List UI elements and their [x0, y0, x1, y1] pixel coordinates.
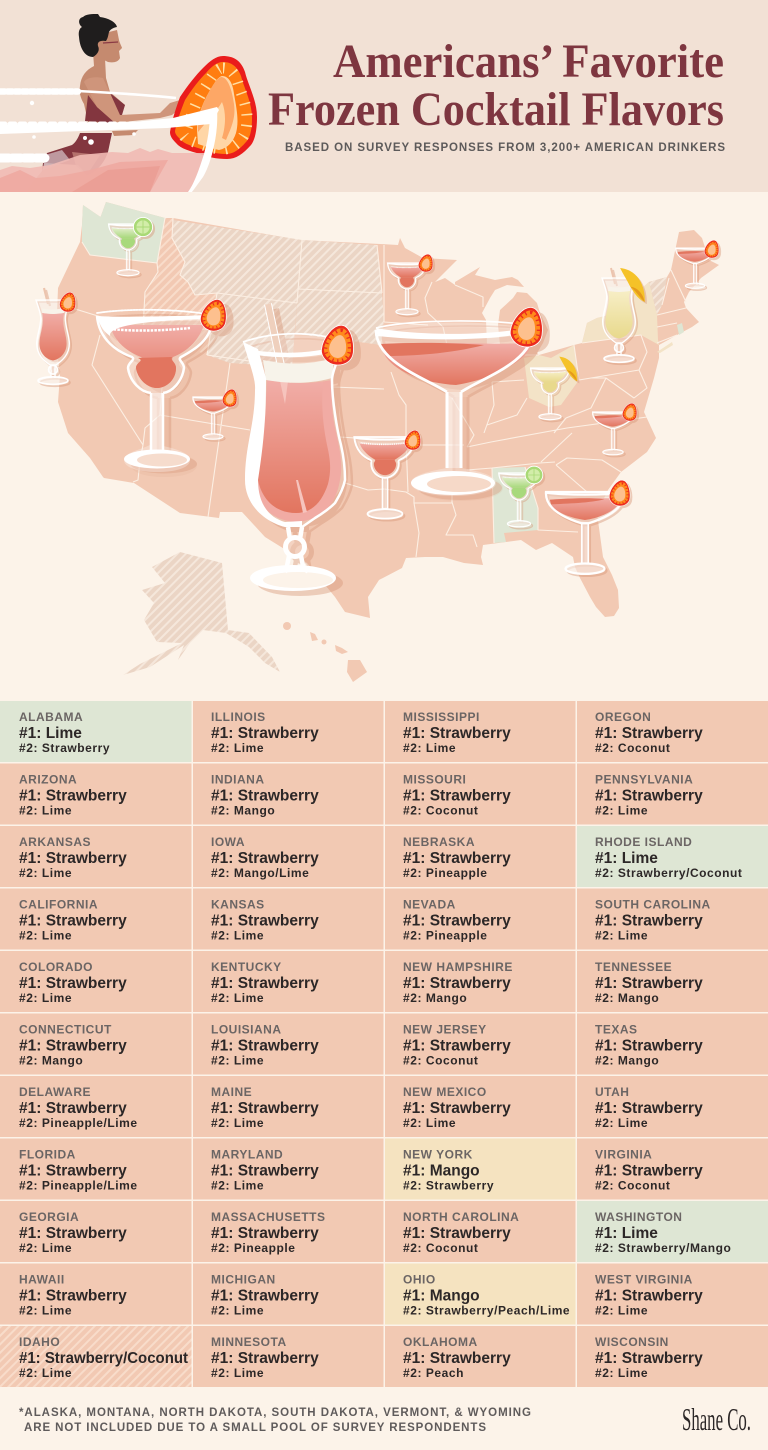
New Jersey: [385, 1014, 576, 1074]
Nevada: #1: Strawberry: [403, 912, 511, 930]
Tennessee: [577, 951, 768, 1012]
Utah: #2: Lime: [595, 1116, 648, 1130]
Delaware: DELAWARE: [19, 1085, 91, 1099]
Wisconsin: #2: Lime: [595, 1366, 648, 1380]
Vermont: [649, 277, 667, 315]
South Carolina: #1: Strawberry: [595, 912, 703, 930]
Nevada: [385, 888, 576, 950]
Kansas: KANSAS: [211, 898, 265, 912]
Illinois: #1: Strawberry: [211, 725, 319, 742]
Michigan: MICHIGAN: [211, 1272, 276, 1286]
liquid: [258, 380, 341, 522]
Ohio: [524, 345, 579, 407]
New Jersey: NEW JERSEY: [403, 1022, 487, 1036]
Texas: [577, 1014, 768, 1074]
Nebraska: #2: Pineapple: [403, 866, 488, 880]
New Jersey: #1: Strawberry: [403, 1038, 511, 1054]
Nebraska: NEBRASKA: [403, 835, 475, 849]
South Carolina: [577, 888, 768, 950]
West Virginia: [577, 1264, 768, 1324]
South Carolina: #2: Lime: [595, 928, 648, 942]
Tennessee: #2: Mango: [595, 991, 659, 1005]
West Virginia: WEST VIRGINIA: [595, 1272, 693, 1286]
arm: [84, 77, 184, 123]
Arizona: #1: Strawberry: [19, 788, 127, 804]
Louisiana: #1: Strawberry: [211, 1038, 319, 1054]
Idaho: #2: Lime: [19, 1366, 72, 1380]
drink: Alabama lime margarita: [499, 466, 543, 527]
Colorado: #1: Strawberry: [19, 975, 127, 992]
New Mexico: #2: Lime: [403, 1116, 456, 1130]
drink: Oklahoma strawberry margarita: [354, 429, 423, 519]
Minnesota: #1: Strawberry: [211, 1350, 319, 1367]
Florida: [0, 1138, 192, 1200]
Connecticut: #2: Mango: [19, 1054, 83, 1068]
Oregon: #2: Coconut: [595, 741, 670, 755]
Idaho: [143, 218, 217, 355]
Oregon: [577, 701, 768, 762]
Kansas: #1: Strawberry: [211, 912, 319, 930]
North Carolina: #1: Strawberry: [403, 1225, 511, 1242]
Wisconsin: [577, 1326, 768, 1387]
Virginia: #2: Coconut: [595, 1178, 670, 1192]
Indiana: INDIANA: [211, 772, 264, 786]
Kentucky: #1: Strawberry: [211, 975, 319, 992]
Maine: [193, 1076, 384, 1137]
drink: Ohio mango margarita: [531, 357, 577, 420]
Kentucky: [193, 951, 384, 1012]
Utah: [577, 1076, 768, 1137]
Missouri: #1: Strawberry: [403, 788, 511, 804]
drink: Illinois strawberry coupe: [376, 305, 546, 496]
Missouri: #2: Coconut: [403, 804, 478, 818]
Rhode Island: #2: Strawberry/Coconut: [595, 866, 742, 880]
Pennsylvania: [577, 764, 768, 824]
white left wall: [243, 342, 302, 527]
Minnesota: #2: Lime: [211, 1366, 264, 1380]
lower forearm: [112, 130, 138, 136]
Washington: WASHINGTON: [595, 1210, 682, 1224]
New York: #2: Strawberry: [403, 1178, 494, 1192]
Kansas: [193, 888, 384, 950]
Nebraska: #1: Strawberry: [403, 850, 511, 867]
Massachusetts: #1: Strawberry: [211, 1225, 319, 1242]
strawberry garnish: [608, 479, 632, 507]
strawberry garnish: [199, 297, 229, 333]
New Jersey: #2: Coconut: [403, 1054, 478, 1068]
Connecticut: CONNECTICUT: [19, 1022, 112, 1036]
Louisiana: LOUISIANA: [211, 1022, 282, 1036]
Ohio: #1: Mango: [403, 1288, 480, 1304]
Ohio: [385, 1264, 576, 1324]
Washington: #1: Lime: [595, 1225, 658, 1242]
face: [94, 30, 122, 62]
header panel: [0, 0, 768, 192]
North Carolina: [385, 1201, 576, 1262]
woman: [27, 14, 184, 192]
title: Americans’ Favorite: [333, 35, 724, 88]
Colorado: COLORADO: [19, 960, 93, 974]
Louisiana: [193, 1014, 384, 1074]
New Hampshire: #2: Mango: [403, 991, 467, 1005]
Idaho: [0, 1326, 192, 1387]
Texas: TEXAS: [595, 1022, 638, 1036]
Nevada: #2: Pineapple: [403, 928, 488, 942]
California: #2: Lime: [19, 928, 72, 942]
Colorado: #2: Lime: [19, 991, 72, 1005]
Tennessee: #1: Strawberry: [595, 975, 703, 992]
Rhode Island: [677, 323, 684, 335]
Mississippi: [385, 701, 576, 762]
Nebraska: [385, 826, 576, 887]
Massachusetts: [193, 1201, 384, 1262]
Hawaii: [283, 622, 367, 682]
Alabama: [0, 701, 192, 762]
Delaware: #1: Strawberry: [19, 1100, 127, 1117]
Alabama: ALABAMA: [19, 710, 83, 724]
drink: New York mango hurricane: [602, 268, 645, 362]
strawberry garnish: [58, 291, 78, 313]
strawberry garnish: [403, 429, 423, 451]
footnote: ARE NOT INCLUDED DUE TO A SMALL POOL OF SURVEY RESPONDENTS: [24, 1422, 486, 1434]
Washington: [82, 202, 165, 263]
subtitle: BASED ON SURVEY RESPONSES FROM 3,200+ AMERICAN DRINKERS: [285, 142, 725, 154]
New York: [582, 282, 673, 353]
New Mexico: #1: Strawberry: [403, 1100, 511, 1117]
Florida: FLORIDA: [19, 1148, 76, 1162]
drink: Colorado strawberry hurricane: [243, 304, 356, 591]
New Mexico: [385, 1076, 576, 1137]
New York: #1: Mango: [403, 1162, 480, 1180]
strawberry garnish: [703, 239, 721, 259]
Iowa: #1: Strawberry: [211, 850, 319, 867]
California: CALIFORNIA: [19, 898, 98, 912]
Oklahoma: #2: Peach: [403, 1366, 464, 1380]
drink: Florida strawberry coupe: [546, 479, 632, 574]
drink: Nevada strawberry coupe: [193, 388, 239, 439]
Florida: #1: Strawberry: [19, 1162, 127, 1180]
North Carolina: #2: Coconut: [403, 1241, 478, 1255]
straw: [268, 304, 281, 366]
drink: Oregon strawberry hurricane: [36, 288, 78, 384]
Alaska: [123, 552, 280, 675]
Arkansas: ARKANSAS: [19, 835, 91, 849]
foam: [263, 358, 334, 383]
Maryland: #1: Strawberry: [211, 1162, 319, 1180]
Idaho: #1: Strawberry/Coconut: [19, 1350, 188, 1367]
Ohio: OHIO: [403, 1272, 436, 1286]
Maine: #1: Strawberry: [211, 1100, 319, 1117]
Oklahoma: #1: Strawberry: [403, 1350, 511, 1367]
Hawaii: #1: Strawberry: [19, 1288, 127, 1304]
Michigan: #2: Lime: [211, 1304, 264, 1318]
Wisconsin: #1: Strawberry: [595, 1350, 703, 1367]
Oregon: #1: Strawberry: [595, 725, 703, 742]
Massachusetts: MASSACHUSETTS: [211, 1210, 326, 1224]
strawberry garnish: [221, 388, 239, 408]
Illinois: ILLINOIS: [211, 710, 266, 724]
table of state results: [0, 701, 768, 1387]
Minnesota: [193, 1326, 384, 1387]
Kentucky: #2: Lime: [211, 991, 264, 1005]
drink: Maine strawberry coupe: [676, 239, 721, 288]
Rhode Island: RHODE ISLAND: [595, 835, 692, 849]
drink: North Carolina strawberry coupe: [593, 402, 639, 455]
Minnesota: MINNESOTA: [211, 1335, 287, 1349]
Texas: #1: Strawberry: [595, 1038, 703, 1054]
Michigan: [193, 1264, 384, 1324]
Connecticut: #1: Strawberry: [19, 1038, 127, 1054]
illustration: woman in cocktail glass: [0, 14, 257, 192]
strawberry garnish: [417, 253, 435, 273]
Maine: #2: Lime: [211, 1116, 264, 1130]
legs behind the liquid: [27, 160, 110, 192]
Idaho: IDAHO: [19, 1335, 60, 1349]
Iowa: [193, 826, 384, 887]
rims: [243, 334, 345, 342]
neck, ball and base: [287, 527, 303, 566]
footnote: *ALASKA, MONTANA, NORTH DAKOTA, SOUTH DAKOTA, VERMONT, & WYOMING: [19, 1407, 531, 1419]
Delaware: [0, 1076, 192, 1137]
Alabama: #1: Lime: [19, 725, 82, 742]
Wisconsin: WISCONSIN: [595, 1335, 669, 1349]
Alabama: [492, 467, 538, 543]
Washington: [577, 1201, 768, 1262]
Hawaii: [0, 1264, 192, 1324]
Maryland: #2: Lime: [211, 1178, 264, 1192]
Pennsylvania: #1: Strawberry: [595, 788, 703, 804]
Arkansas: #1: Strawberry: [19, 850, 127, 867]
map of the United States: [56, 202, 719, 682]
Mississippi: #1: Strawberry: [403, 725, 511, 742]
Texas: #2: Mango: [595, 1054, 659, 1068]
swimsuit top: [85, 93, 125, 123]
Ohio: #2: Strawberry/Peach/Lime: [403, 1304, 570, 1318]
Oklahoma: OKLAHOMA: [403, 1335, 478, 1349]
California: [0, 888, 192, 950]
Mississippi: #2: Lime: [403, 741, 456, 755]
Indiana: #2: Mango: [211, 804, 275, 818]
cocktail glass liquid: [0, 148, 208, 192]
Virginia: [577, 1138, 768, 1200]
Maryland: MARYLAND: [211, 1148, 283, 1162]
New York: [385, 1138, 576, 1200]
lime garnish: [133, 217, 153, 237]
Indiana: [193, 764, 384, 824]
Missouri: [385, 764, 576, 824]
drink: Washington lime margarita: [109, 217, 153, 276]
lime garnish: [525, 466, 543, 484]
Arizona: #2: Lime: [19, 804, 72, 818]
Oregon: OREGON: [595, 710, 651, 724]
Rhode Island: #1: Lime: [595, 850, 658, 867]
right wall: [302, 342, 345, 527]
Pennsylvania: #2: Lime: [595, 804, 648, 818]
Illinois: [193, 701, 384, 762]
footnote: [19, 1407, 531, 1434]
strawberry garnish: [320, 323, 356, 367]
strawberry slice: [170, 56, 257, 159]
New Hampshire: NEW HAMPSHIRE: [403, 960, 513, 974]
mango garnish: [559, 357, 577, 381]
Montana: [172, 220, 302, 303]
glass rims: [0, 91, 219, 192]
Virginia: #1: Strawberry: [595, 1162, 703, 1180]
Michigan: #1: Strawberry: [211, 1288, 319, 1304]
contiguous states: [56, 202, 719, 618]
glass tint: [243, 335, 345, 527]
Illinois: #2: Lime: [211, 741, 264, 755]
title: Frozen Cocktail Flavors: [268, 83, 724, 136]
Georgia: #2: Lime: [19, 1241, 72, 1255]
Tennessee: TENNESSEE: [595, 960, 672, 974]
swimsuit bottom: [42, 133, 112, 175]
North Dakota: [298, 240, 382, 293]
Utah: UTAH: [595, 1085, 629, 1099]
skin: neck, back and chest: [80, 52, 125, 126]
drink: California strawberry margarita: [97, 297, 229, 472]
Georgia: #1: Strawberry: [19, 1225, 127, 1242]
West Virginia: #1: Strawberry: [595, 1288, 703, 1304]
South Carolina: SOUTH CAROLINA: [595, 898, 711, 912]
Mississippi: MISSISSIPPI: [403, 710, 480, 724]
New Hampshire: [385, 951, 576, 1012]
Maryland: [193, 1138, 384, 1200]
Arizona: ARIZONA: [19, 772, 77, 786]
Connecticut: [0, 1014, 192, 1074]
Virginia: VIRGINIA: [595, 1148, 652, 1162]
strawberry garnish: [508, 305, 546, 349]
Indiana: #1: Strawberry: [211, 788, 319, 804]
Kansas: #2: Lime: [211, 928, 264, 942]
New Mexico: NEW MEXICO: [403, 1085, 487, 1099]
hair: [79, 14, 117, 57]
Georgia: [0, 1201, 192, 1262]
West Virginia: #2: Lime: [595, 1304, 648, 1318]
South Dakota: [295, 289, 384, 345]
Missouri: MISSOURI: [403, 772, 466, 786]
California: #1: Strawberry: [19, 912, 127, 930]
strawberry garnish: [621, 402, 639, 422]
New York: NEW YORK: [403, 1148, 473, 1162]
Maine: MAINE: [211, 1085, 252, 1099]
Arkansas: #2: Lime: [19, 866, 72, 880]
Louisiana: #2: Lime: [211, 1054, 264, 1068]
title: [268, 35, 724, 136]
Nevada: NEVADA: [403, 898, 456, 912]
Massachusetts: #2: Pineapple: [211, 1241, 296, 1255]
mango garnish: [620, 268, 645, 302]
Wyoming: [207, 293, 297, 367]
Rhode Island: [577, 826, 768, 887]
Alabama: #2: Strawberry: [19, 741, 110, 755]
Washington: #2: Strawberry/Mango: [595, 1241, 731, 1255]
Florida: #2: Pineapple/Lime: [19, 1178, 138, 1192]
Hawaii: #2: Lime: [19, 1304, 72, 1318]
drink: Minnesota strawberry margarita: [388, 253, 435, 315]
Hawaii: HAWAII: [19, 1272, 65, 1286]
Arkansas: [0, 826, 192, 887]
North Carolina: NORTH CAROLINA: [403, 1210, 519, 1224]
Oklahoma: [385, 1326, 576, 1387]
New Hampshire: #1: Strawberry: [403, 975, 511, 992]
Delaware: #2: Pineapple/Lime: [19, 1116, 138, 1130]
Iowa: #2: Mango/Lime: [211, 866, 309, 880]
Iowa: IOWA: [211, 835, 245, 849]
Arizona: [0, 764, 192, 824]
Pennsylvania: PENNSYLVANIA: [595, 772, 693, 786]
Utah: #1: Strawberry: [595, 1100, 703, 1117]
Kentucky: KENTUCKY: [211, 960, 282, 974]
Colorado: [0, 951, 192, 1012]
Georgia: GEORGIA: [19, 1210, 79, 1224]
